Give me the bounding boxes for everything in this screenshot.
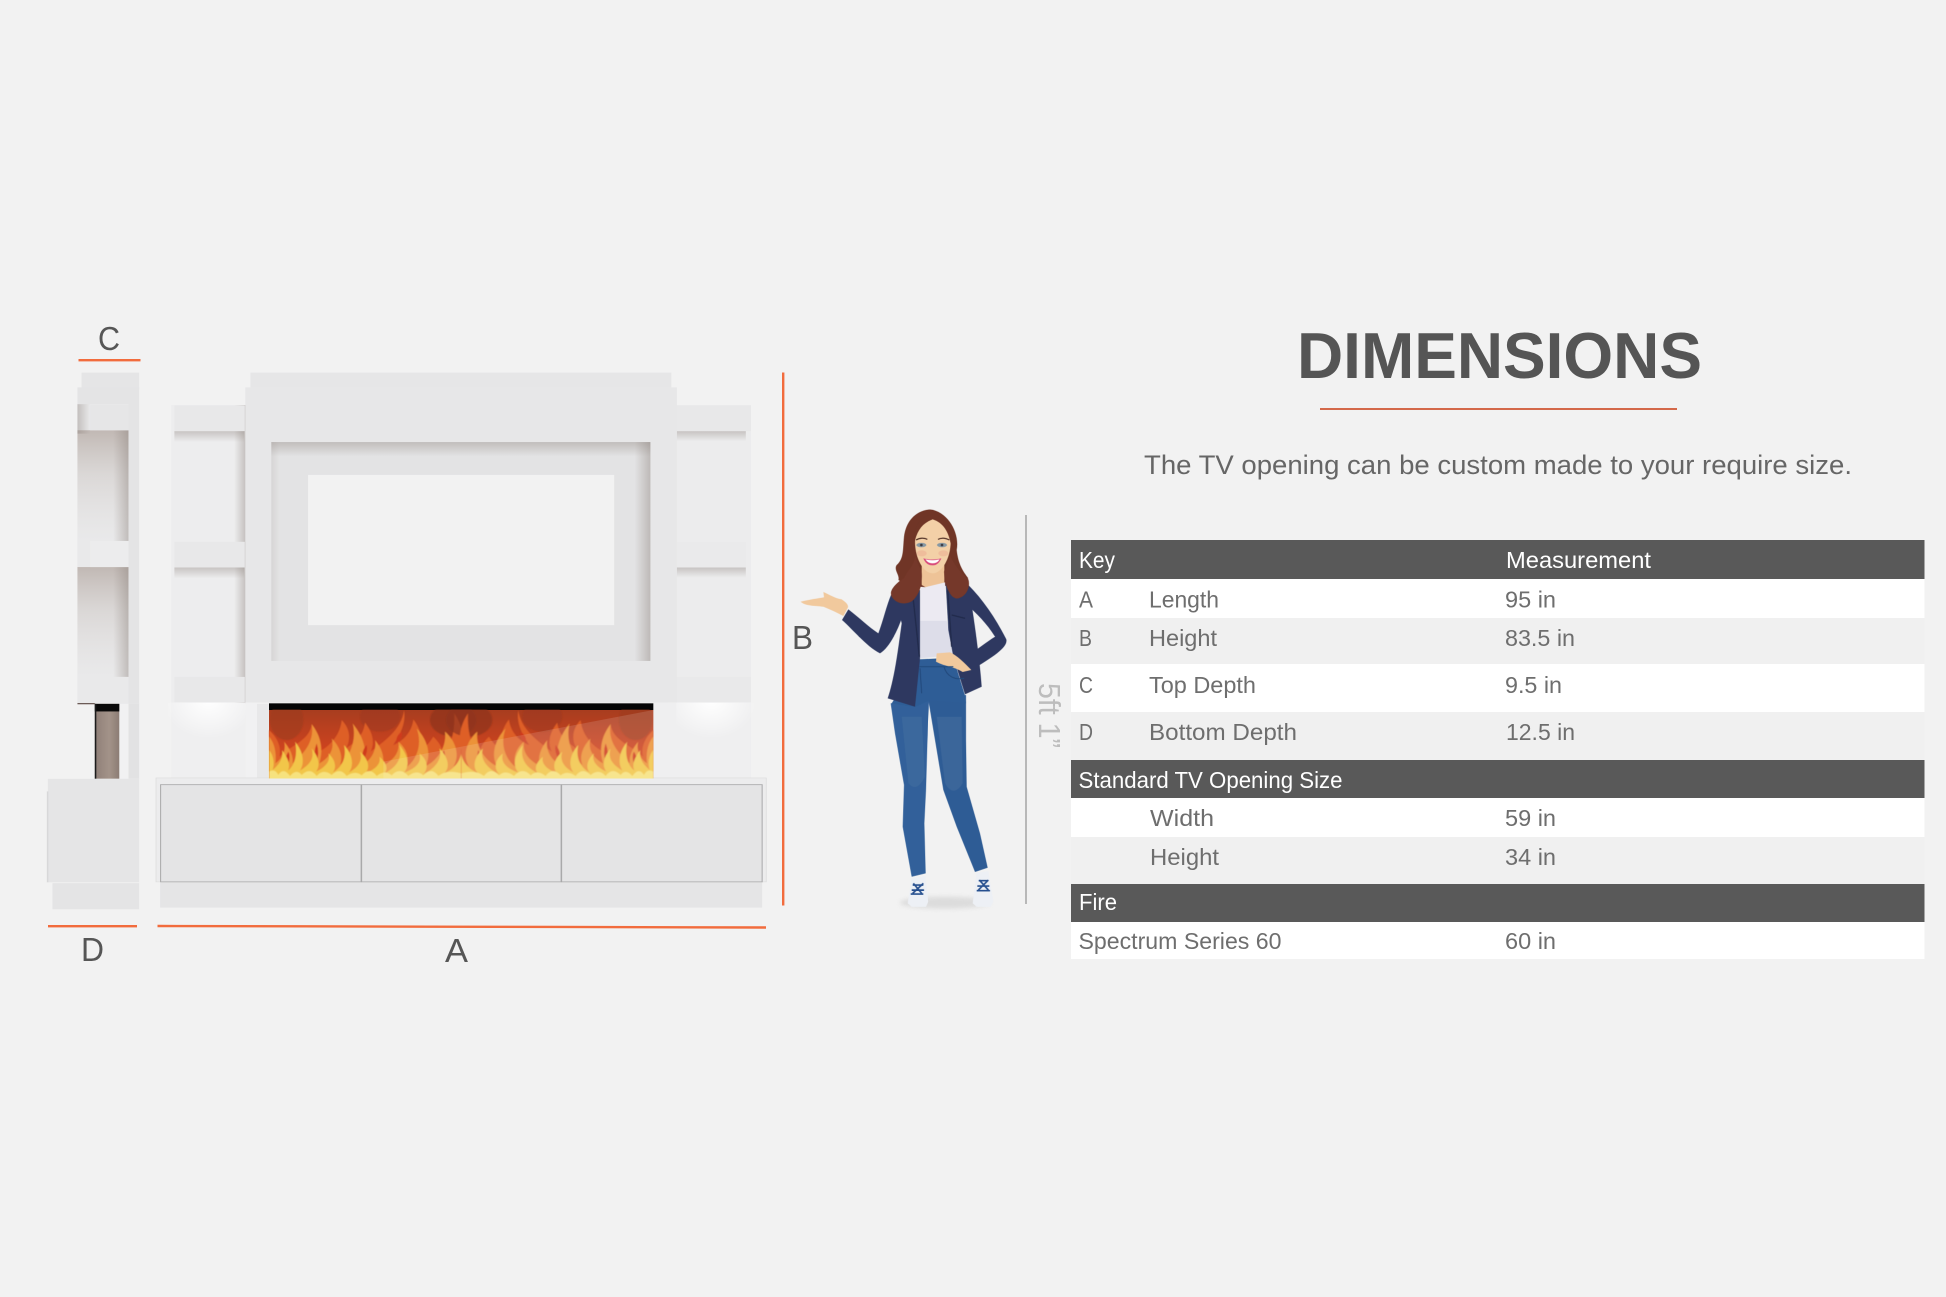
row B height: Height: [1149, 625, 1218, 651]
row opening height: [1071, 837, 1924, 884]
dimension C: [78, 320, 140, 361]
thigh highlights: [902, 717, 925, 787]
row B height: 83.5 in: [1505, 625, 1575, 651]
plinth: [160, 883, 762, 908]
row opening height: Height: [1150, 844, 1220, 870]
dimensions table: [1071, 540, 1924, 959]
front view of unit: [156, 373, 766, 908]
header: standard TV opening size: [1071, 760, 1924, 798]
hair front locks: [891, 555, 969, 603]
header: key and measurement: Measurement: [1506, 547, 1652, 573]
title underline: [1320, 408, 1677, 410]
blazer: [842, 583, 1007, 707]
smile: [923, 558, 941, 565]
header: key and measurement: Key: [1079, 547, 1115, 573]
dimension D: [48, 925, 137, 968]
infographic canvas: [46, 326, 1924, 962]
drawer fronts: [161, 785, 762, 882]
dimension B: B: [792, 619, 813, 656]
height label 5ft 1: 5ft 1”: [1032, 683, 1067, 748]
left leg: [891, 700, 929, 877]
dimension D: D: [81, 931, 104, 968]
right leg: [928, 695, 988, 872]
TV opening: [308, 475, 614, 625]
row spectrum series 60: Spectrum Series 60: [1078, 928, 1282, 954]
row C top depth: C: [1079, 672, 1093, 698]
neck: [922, 565, 944, 592]
subtitle: The TV opening can be custom made to your require size.: [1144, 450, 1852, 480]
fireplace side trim: [246, 703, 676, 779]
row C top depth: 9.5 in: [1505, 672, 1562, 698]
row C top depth: [1071, 664, 1924, 712]
ground shadow: [900, 897, 990, 909]
blazer lapel shading: [913, 590, 965, 657]
row width: [1071, 798, 1924, 837]
glass reflection: [383, 710, 653, 780]
row width: 59 in: [1505, 805, 1556, 831]
row D bottom depth: 12.5 in: [1506, 719, 1575, 745]
face: [915, 519, 951, 573]
pocket and seam details: [919, 667, 964, 693]
hand on hip: [936, 652, 971, 672]
header: fire: [1071, 884, 1924, 922]
base cabinet: [156, 778, 766, 908]
row width: Width: [1150, 805, 1214, 831]
row spectrum series 60: [1071, 922, 1924, 959]
cheeks: [917, 550, 927, 556]
row B height: [1071, 618, 1924, 664]
row spectrum series 60: 60 in: [1505, 928, 1556, 954]
header: standard TV opening size: Standard TV Opening Size: [1078, 767, 1342, 793]
dimension A: A: [445, 932, 468, 969]
header: fire: Fire: [1079, 889, 1117, 915]
row A length: A: [1079, 586, 1094, 612]
right shelving bay: [677, 406, 751, 712]
row C top depth: Top Depth: [1149, 672, 1256, 698]
row D bottom depth: [1071, 712, 1924, 760]
header: key and measurement: [1071, 540, 1924, 579]
hair back: [896, 509, 968, 587]
row D bottom depth: Bottom Depth: [1149, 719, 1297, 745]
eyes and brows: [916, 538, 949, 547]
dimension C: C: [98, 320, 120, 357]
central TV surround: [245, 373, 677, 703]
left shelving bay: [174, 405, 246, 712]
side view of unit: [47, 373, 139, 909]
row opening height: 34 in: [1505, 844, 1556, 870]
right shoe: [973, 871, 993, 907]
height marker line: [1025, 515, 1027, 904]
hair fringe: [914, 515, 951, 543]
pointing hand: [801, 592, 848, 616]
row A length: [1071, 579, 1924, 618]
electric fire with flames: [269, 700, 653, 780]
left shoe: [908, 876, 928, 907]
row A length: 95 in: [1505, 586, 1556, 612]
jeans waist: [892, 658, 966, 707]
row D bottom depth: D: [1079, 719, 1093, 745]
title: DIMENSIONS: [1297, 319, 1702, 392]
row B height: B: [1079, 625, 1092, 651]
t-shirt: [920, 582, 947, 621]
row A length: Length: [1149, 586, 1219, 612]
person figure for scale: [801, 509, 1007, 909]
